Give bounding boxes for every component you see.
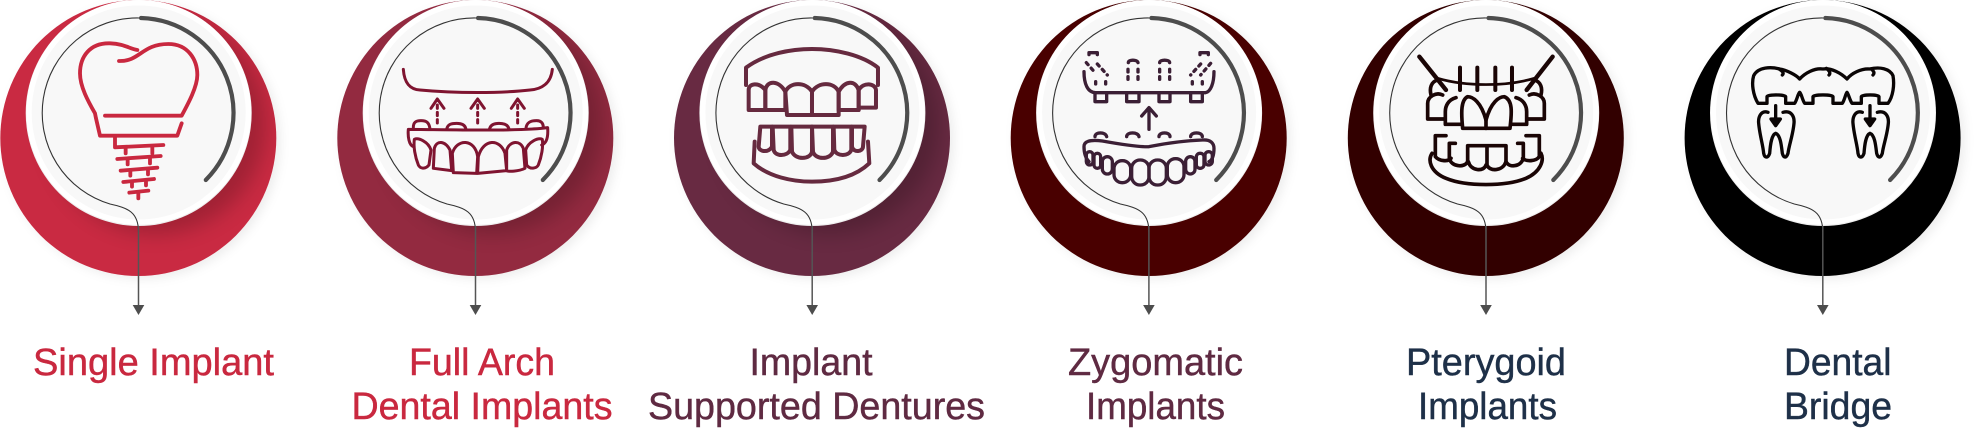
white disc bbox=[26, 0, 252, 226]
disc assembly bbox=[0, 0, 276, 315]
label: zygomatic implants: Implants bbox=[1086, 386, 1225, 428]
disc shadow bbox=[766, 26, 942, 236]
ring bbox=[1390, 18, 1581, 232]
panel: dental bridge bbox=[1685, 0, 1961, 428]
label: full arch dental implants: Dental Implants bbox=[352, 386, 612, 428]
label: zygomatic implants: Zygomatic bbox=[1068, 342, 1243, 384]
ring bbox=[42, 18, 233, 232]
label: pterygoid implants: Pterygoid bbox=[1406, 342, 1566, 384]
coloured disc bbox=[337, 0, 613, 276]
white disc bbox=[1373, 0, 1599, 226]
label: single implant: Single Implant bbox=[33, 342, 274, 384]
disc assembly bbox=[674, 0, 950, 315]
white disc bbox=[699, 0, 925, 226]
coloured disc bbox=[674, 0, 950, 276]
disc assembly bbox=[1348, 0, 1624, 315]
ring bbox=[1053, 18, 1244, 232]
coloured disc bbox=[0, 0, 276, 276]
white disc bbox=[1036, 0, 1262, 226]
disc assembly bbox=[1011, 0, 1287, 315]
arrow bbox=[1480, 226, 1492, 315]
disc assembly bbox=[337, 0, 613, 315]
label: implant supported dentures: Supported Dentures bbox=[648, 386, 985, 428]
panel: pterygoid implants bbox=[1348, 0, 1624, 428]
panel: implant supported dentures bbox=[648, 0, 985, 428]
panel: single implant bbox=[0, 0, 276, 384]
arrow bbox=[133, 226, 144, 315]
arrow bbox=[1143, 226, 1155, 315]
icon: zygomatic bbox=[1084, 53, 1214, 185]
arrow bbox=[806, 226, 818, 315]
disc shadow bbox=[383, 14, 603, 234]
icon: full arch bbox=[403, 69, 552, 173]
coloured disc bbox=[1685, 0, 1961, 276]
panel: zygomatic implants bbox=[1011, 0, 1287, 428]
panel: full arch dental implants bbox=[337, 0, 613, 428]
label: dental bridge: Bridge bbox=[1784, 386, 1892, 428]
label: implant supported dentures: Implant bbox=[750, 342, 873, 384]
ring bbox=[716, 18, 907, 232]
icon: implant bbox=[80, 43, 197, 198]
white disc bbox=[363, 0, 589, 226]
icon: dentures bbox=[746, 49, 878, 182]
white disc bbox=[1710, 0, 1936, 226]
coloured disc bbox=[1011, 0, 1287, 276]
coloured disc bbox=[1348, 0, 1624, 276]
icon: pterygoid bbox=[1419, 57, 1553, 185]
icon: dental bridge bbox=[1753, 68, 1894, 157]
disc shadow bbox=[46, 14, 266, 234]
label: pterygoid implants: Implants bbox=[1418, 386, 1557, 428]
arrow bbox=[1817, 226, 1829, 315]
ring bbox=[379, 18, 570, 232]
ring bbox=[1727, 18, 1918, 232]
disc assembly bbox=[1685, 0, 1961, 315]
label: full arch dental implants: Full Arch bbox=[409, 342, 555, 384]
arrow bbox=[470, 226, 481, 315]
label: dental bridge: Dental bbox=[1784, 342, 1892, 384]
